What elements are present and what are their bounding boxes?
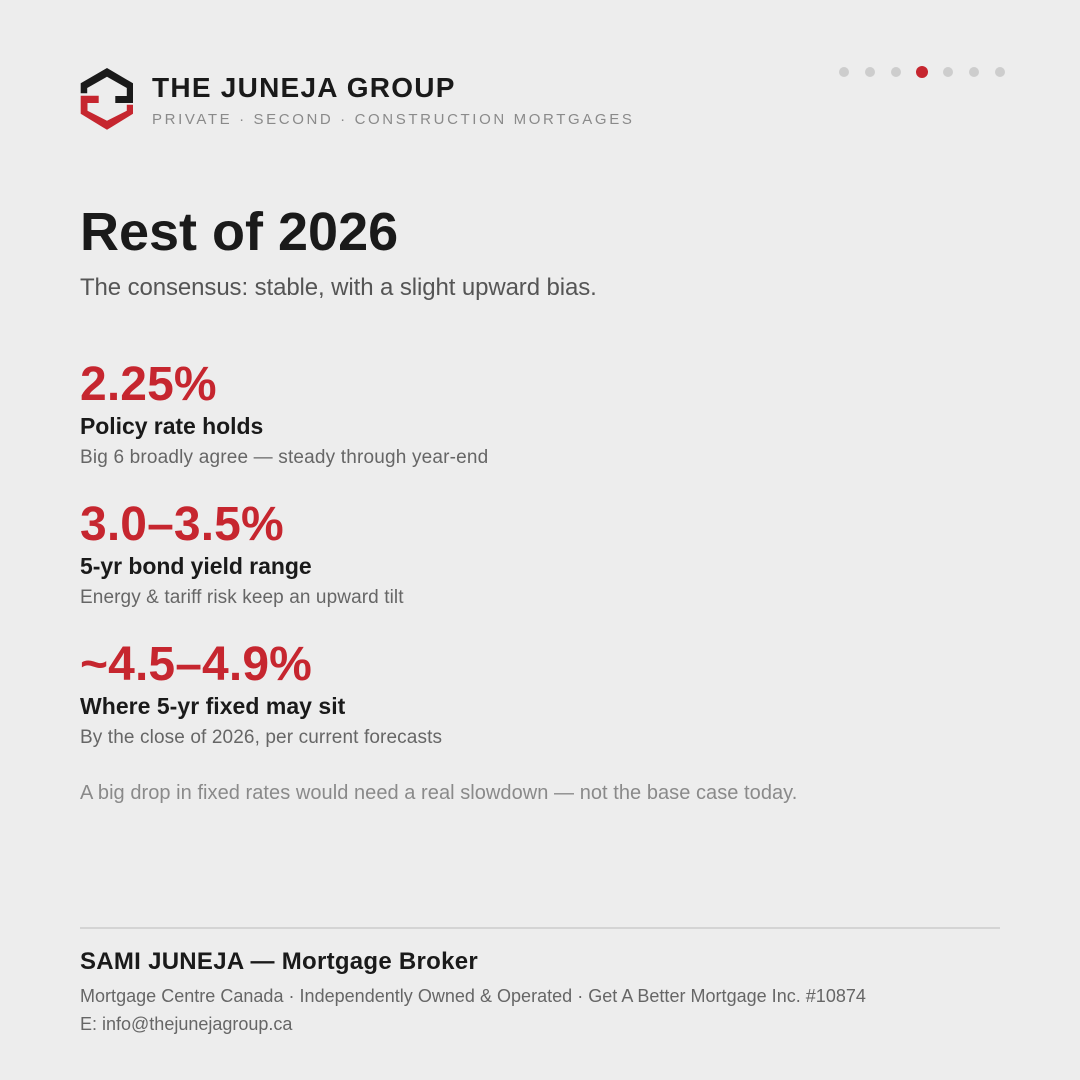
- value: 2.25%: [80, 358, 217, 411]
- footer: broker name: SAMI JUNEJA — Mortgage Broker: [80, 948, 478, 975]
- value: 3.0–3.5%: [80, 498, 284, 551]
- footer: company line: Mortgage Centre Canada · Independently Owned & Operated · Get A Better Mortgage Inc. #10874: [80, 986, 866, 1006]
- title: Rest of 2026: [80, 202, 398, 262]
- description: Energy & tariff risk keep an upward tilt: [80, 587, 404, 608]
- description: Big 6 broadly agree — steady through year-end: [80, 447, 488, 468]
- label: Where 5-yr fixed may sit: [80, 693, 345, 719]
- stat: policy rate: [80, 358, 488, 468]
- logo: hexagon mark: [80, 68, 133, 130]
- stat: 5-yr fixed: [80, 638, 442, 748]
- value: ~4.5–4.9%: [80, 638, 312, 691]
- description: By the close of 2026, per current forecasts: [80, 727, 442, 748]
- stat: bond yield: [80, 498, 404, 608]
- subtitle: The consensus: stable, with a slight upward bias.: [80, 274, 597, 301]
- footer: email: E: info@thejunejagroup.ca: [80, 1014, 292, 1034]
- label: Policy rate holds: [80, 413, 263, 439]
- closing note: A big drop in fixed rates would need a real slowdown — not the base case today.: [80, 782, 797, 804]
- label: 5-yr bond yield range: [80, 553, 312, 579]
- brand name: THE JUNEJA GROUP: [152, 72, 456, 103]
- pagination dots: [839, 66, 1005, 78]
- brand tagline: PRIVATE · SECOND · CONSTRUCTION MORTGAGES: [152, 111, 634, 128]
